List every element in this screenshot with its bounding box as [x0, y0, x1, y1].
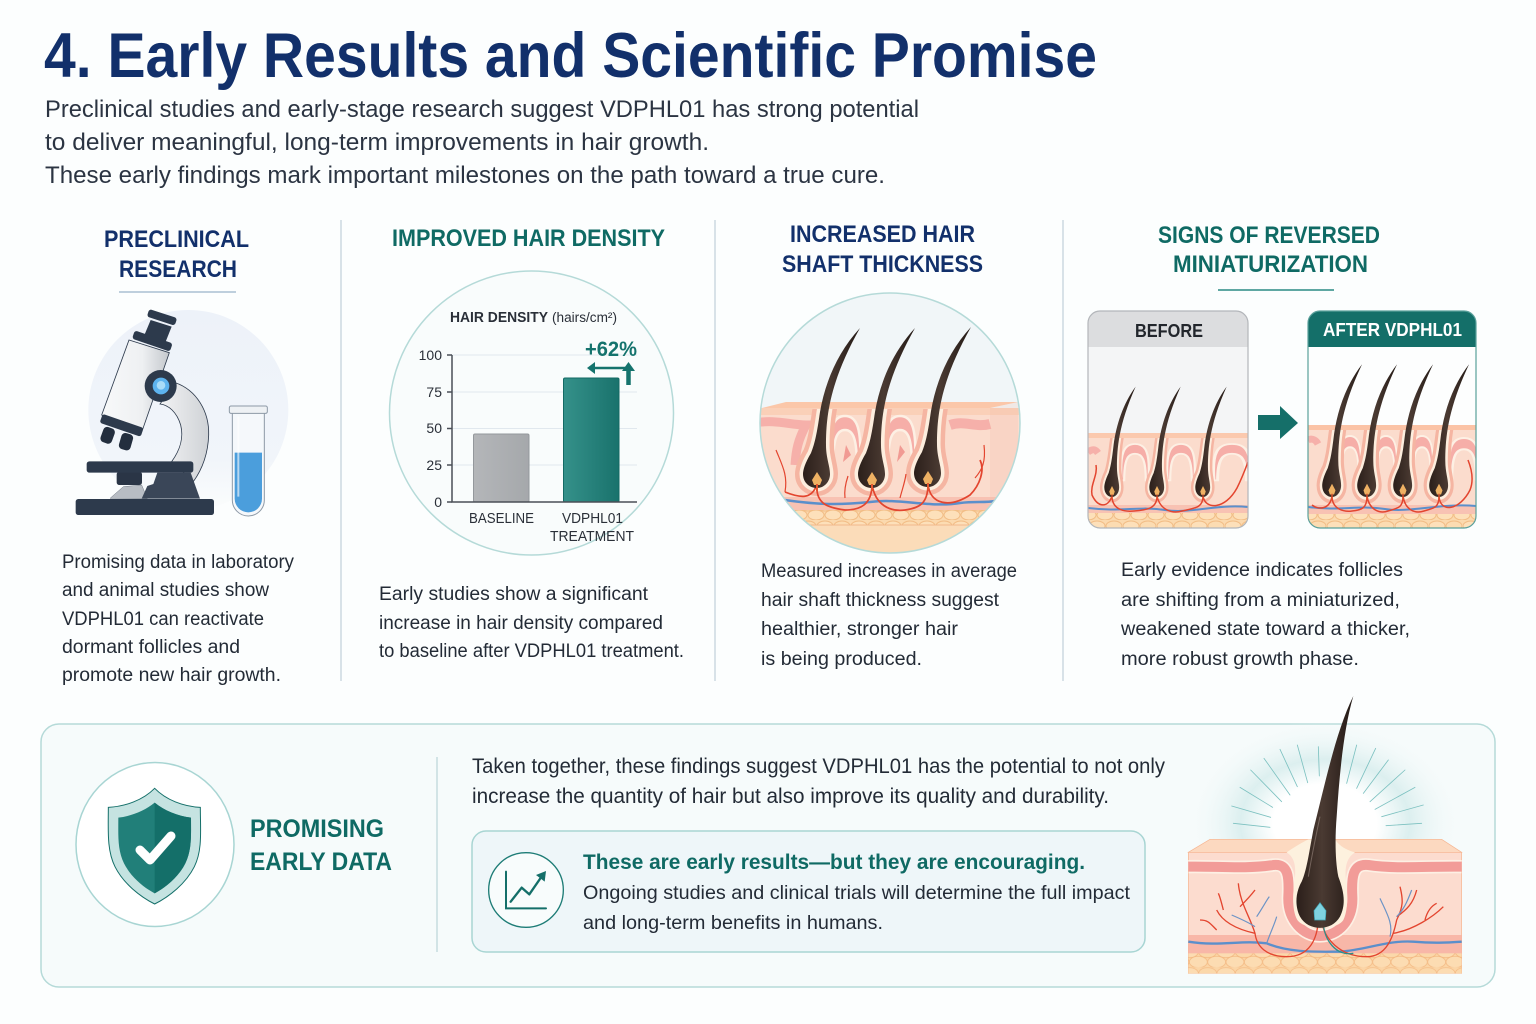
heading: increased hair shaft thickness: INCREASED HAIR: [790, 221, 975, 248]
panel: improved hair density: [379, 225, 684, 662]
illustration: single hair follicle with radiating lines: [1188, 696, 1462, 973]
heading: promising early data: PROMISING: [250, 815, 384, 843]
text: shaft thickness description: [761, 561, 1017, 670]
card: after vdphl01: [1308, 311, 1479, 528]
heading: promising early data: [250, 815, 392, 876]
callout: encouraging early results: Ongoing studies and clinical trials will determine the full impact: [583, 882, 1131, 904]
title: 4. Early Results and Scientific Promise: [44, 21, 1097, 91]
panel: promising early data summary: [41, 696, 1495, 987]
heading: improved hair density: IMPROVED HAIR DENSITY: [392, 225, 665, 252]
bar chart: hair density: HAIR DENSITY: [450, 310, 548, 326]
bar chart: hair density: 75: [426, 384, 442, 400]
card: after vdphl01: AFTER VDPHL01: [1323, 320, 1462, 340]
heading: signs of reversed miniaturization: [1158, 222, 1380, 290]
text: summary statement: [472, 755, 1165, 808]
text: preclinical description: promote new hair growth.: [62, 665, 281, 686]
text: miniaturization description: [1120, 560, 1410, 670]
bar chart: hair density: 0: [434, 494, 442, 510]
bar chart: hair density: (hairs/cm²): [552, 310, 617, 325]
bar chart: hair density: 25: [426, 457, 442, 473]
text: summary statement: Taken together, these findings suggest VDPHL01 has the potential to not only: [472, 755, 1165, 778]
text: shaft thickness description: healthier, stronger hair: [761, 619, 959, 640]
text: density description: to baseline after VDPHL01 treatment.: [379, 641, 684, 662]
text: miniaturization description: more robust growth phase.: [1121, 649, 1359, 670]
text: preclinical description: [62, 552, 294, 686]
text: shaft thickness description: Measured increases in average: [761, 561, 1017, 582]
heading: signs of reversed miniaturization: SIGNS OF REVERSED: [1158, 222, 1380, 249]
panel: signs of reversed miniaturization: [1088, 222, 1479, 670]
bar chart: hair density: +62%: [585, 338, 637, 361]
text: shaft thickness description: is being produced.: [761, 649, 922, 670]
icon: microscope and test tube: [76, 309, 288, 516]
text: miniaturization description: Early evidence indicates follicles: [1121, 560, 1403, 581]
heading: increased hair shaft thickness: [782, 221, 983, 278]
callout: encouraging early results: These are early results—but they are encouraging.: [583, 850, 1085, 874]
icon: shield with check: [76, 762, 234, 926]
illustration: skin cross-section with three thick hairs: [755, 290, 1025, 560]
text: preclinical description: Promising data in laboratory: [62, 552, 294, 573]
bar chart: hair density: TREATMENT: [550, 529, 634, 545]
intro text: to deliver meaningful, long-term improvements in hair growth.: [45, 129, 709, 156]
panel: preclinical research: [62, 226, 294, 686]
bar chart: hair density: 100: [419, 347, 442, 363]
heading: promising early data: EARLY DATA: [250, 848, 392, 876]
heading: preclinical research: RESEARCH: [119, 256, 237, 283]
arrow: before to after: [1258, 406, 1298, 439]
bar chart: hair density: VDPHL01: [562, 511, 623, 527]
heading: preclinical research: PRECLINICAL: [104, 226, 249, 253]
card: before: [1088, 311, 1251, 528]
text: preclinical description: dormant follicles and: [62, 637, 240, 658]
bar chart: hair density: [390, 271, 674, 555]
text: preclinical description: and animal studies show: [62, 580, 269, 601]
panel: increased hair shaft thickness: [755, 221, 1025, 670]
text: summary statement: increase the quantity of hair but also improve its quality and durability.: [472, 785, 1109, 808]
text: shaft thickness description: hair shaft thickness suggest: [761, 590, 1000, 611]
text: preclinical description: VDPHL01 can reactivate: [62, 609, 264, 630]
bar chart: hair density: 50: [426, 420, 442, 436]
heading: preclinical research: [104, 226, 249, 292]
intro text: Preclinical studies and early-stage research suggest VDPHL01 has strong potential: [45, 96, 919, 123]
heading: increased hair shaft thickness: SHAFT THICKNESS: [782, 251, 983, 278]
text: density description: Early studies show a significant: [379, 584, 649, 605]
text: density description: [379, 584, 684, 662]
callout: encouraging early results: and long-term benefits in humans.: [583, 912, 883, 934]
card: before: BEFORE: [1135, 321, 1203, 341]
text: miniaturization description: weakened state toward a thicker,: [1120, 619, 1410, 640]
intro text: [45, 96, 919, 189]
bar chart: hair density: BASELINE: [469, 511, 534, 527]
intro text: These early findings mark important milestones on the path toward a true cure.: [45, 162, 885, 189]
text: miniaturization description: are shifting from a miniaturized,: [1121, 590, 1400, 611]
heading: signs of reversed miniaturization: MINIATURIZATION: [1173, 251, 1368, 278]
icon: rising line chart: [489, 853, 563, 927]
callout: encouraging early results: [472, 831, 1145, 952]
text: density description: increase in hair density compared: [379, 613, 663, 634]
